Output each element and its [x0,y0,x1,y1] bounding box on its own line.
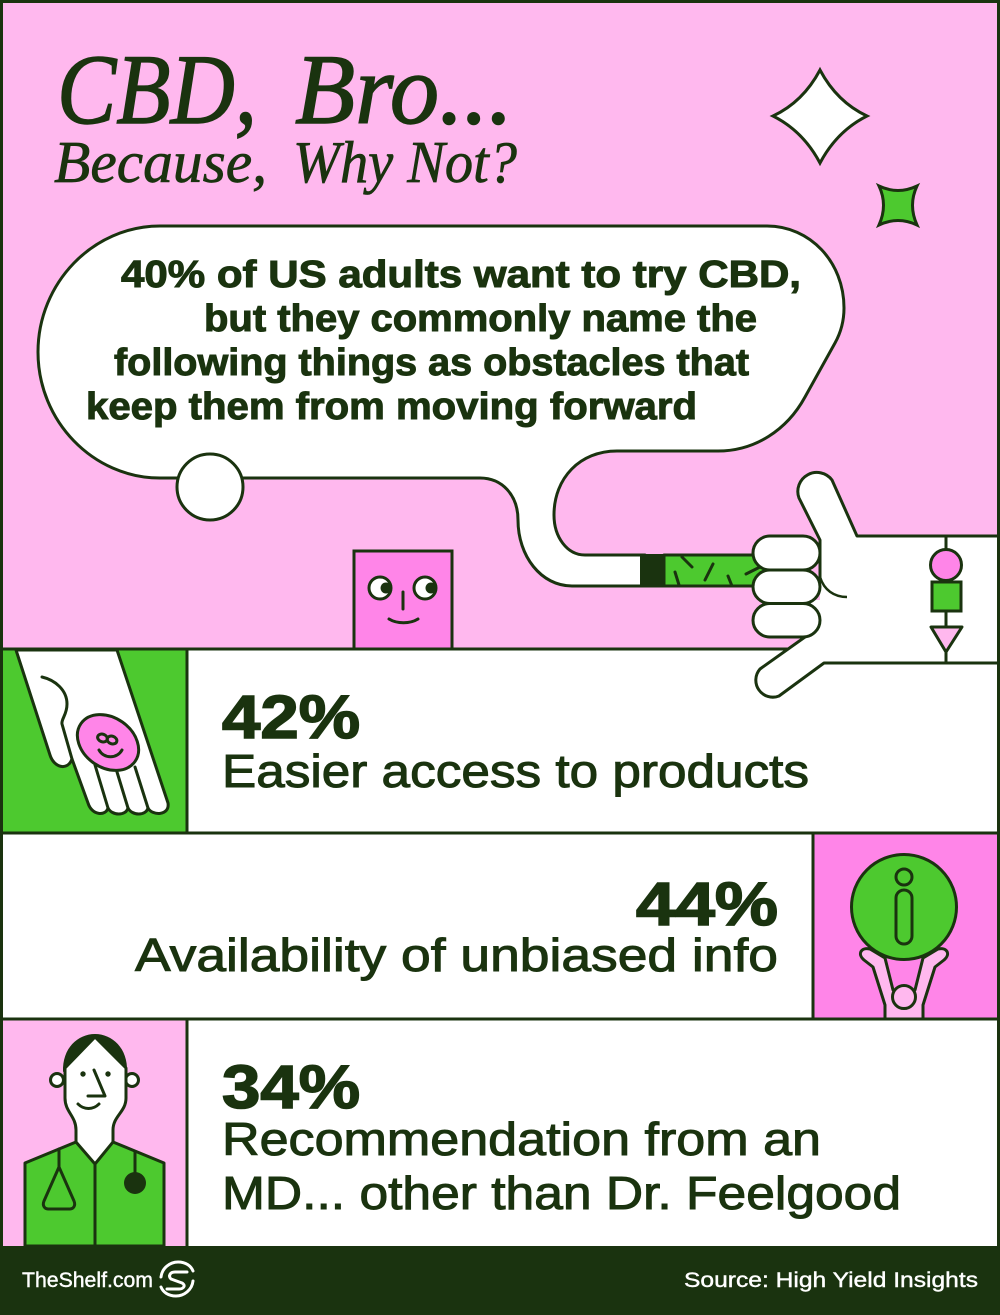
title: CBD, [57,34,257,145]
title: Because, [54,129,267,195]
stat: 42%: 42% [222,683,360,751]
icon: green panel with hand holding pill [3,649,187,833]
callout text [86,254,801,428]
stat: 34%: 34% [222,1053,360,1121]
title: Why Not? [293,129,517,195]
callout text: 40% of US adults want to try CBD, [121,254,801,296]
callout text: following things as obstacles that [114,342,749,384]
panel: row 3 [3,1019,997,1246]
callout text: keep them from moving forward [86,386,697,428]
speech bubble and arm [38,226,844,588]
footer [0,1246,1000,1315]
title [54,34,517,195]
panel: row 2 [3,833,997,1019]
stat: 34% [222,1053,901,1219]
icon: large sparkle [773,70,867,163]
icon: doctor with stethoscope [3,1020,187,1246]
stat: 44%: Availability of unbiased info [135,929,778,981]
panel: row 1 [3,649,997,833]
callout text: but they commonly name the [204,298,757,340]
stat: 42%: Easier access to products [222,745,809,797]
title: Bro... [295,34,513,145]
stat: 44%: 44% [636,870,778,938]
stat: 34%: Recommendation from an [222,1113,821,1165]
stat: 34%: MD... other than Dr. Feelgood [222,1167,901,1219]
source credit: Source: High Yield Insights [684,1269,978,1292]
icon: hand shaka with bracelet [753,472,1000,697]
stat: 44% [135,870,778,981]
icon: small green sparkle [879,186,917,225]
icon: figure lifting info ball [813,834,997,1019]
icon: logo [161,1262,193,1296]
divider lines [0,649,1000,1246]
character: pink square face [354,551,452,649]
footer brand: TheShelf.com [22,1269,153,1292]
panel: header background [2,2,998,650]
stat: 42% [222,683,809,797]
